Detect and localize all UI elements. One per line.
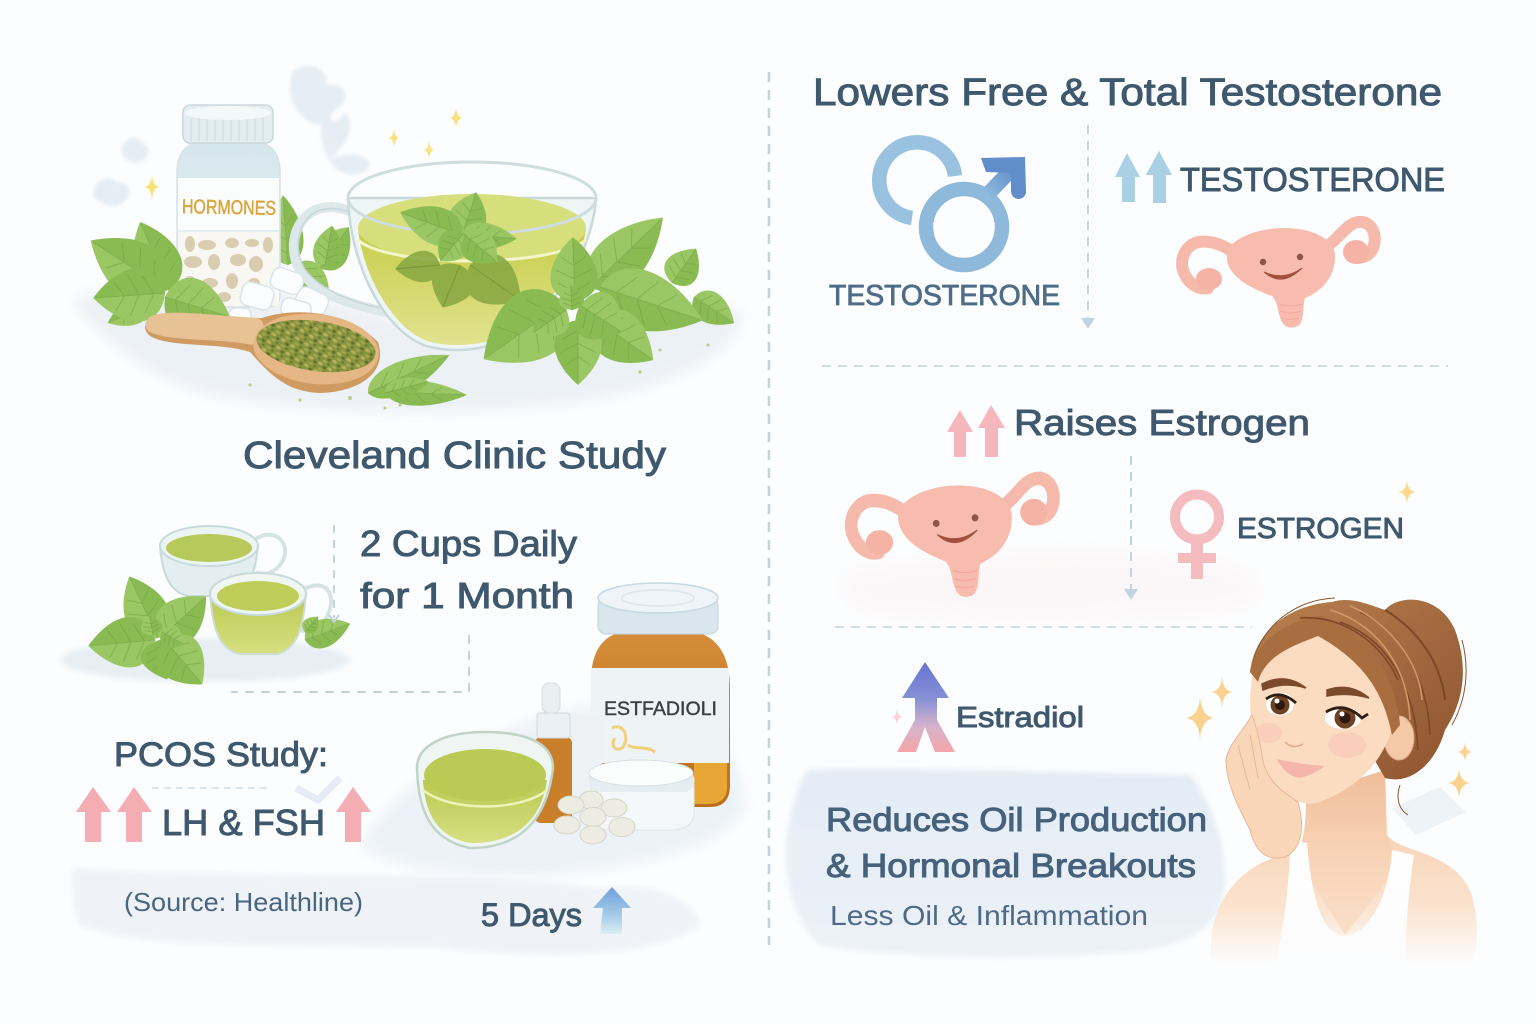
bottom-left wash <box>72 868 700 955</box>
tablets <box>229 265 331 324</box>
blue wash <box>360 700 745 876</box>
brows <box>1262 679 1369 698</box>
shadow <box>60 638 350 682</box>
amber bottle <box>591 583 730 807</box>
panel: estradiol products <box>360 583 745 876</box>
tea cup <box>294 162 596 350</box>
faint pink wash <box>843 550 1258 621</box>
text: 2 Cups Daily for 1 Month: for 1 Month <box>360 575 574 616</box>
dashed connector: testosterone <box>1082 125 1094 327</box>
illustration shadow wash <box>72 285 741 412</box>
wooden spoon with seeds <box>145 308 382 393</box>
icon: 5 days up arrow <box>593 887 631 934</box>
heading: Lowers Free and Total Testosterone: Lowers Free & Total Testosterone <box>813 72 1442 114</box>
left mint leaves <box>75 213 238 343</box>
icon: estrogen up arrows <box>947 405 1005 457</box>
dashed connector: cups <box>329 525 339 622</box>
icon: estradiol arrow <box>892 662 955 752</box>
icon: male symbols <box>879 142 1026 265</box>
illustration: woman <box>1186 598 1477 965</box>
heading: Raises Estrogen: Raises Estrogen <box>1014 402 1310 443</box>
ear <box>1384 716 1414 760</box>
label: estrogen: ESTROGEN <box>1237 513 1404 545</box>
leaves behind cup handle <box>266 194 363 311</box>
panel: two cups and mint <box>60 526 355 700</box>
dropper bottle and tube <box>535 683 602 823</box>
submerged mint leaves <box>394 244 535 321</box>
divider: horizontal upper <box>822 365 1448 367</box>
divider: horizontal lower <box>835 626 1252 628</box>
hair back and bun <box>1250 600 1463 779</box>
label: estradiol: Estradiol <box>956 702 1084 734</box>
text: reduces oil <box>826 801 1207 884</box>
icon: LH and FSH up arrows <box>76 787 371 842</box>
label: testosterone right: TESTOSTERONE <box>1180 161 1445 198</box>
sparkles woman <box>1186 677 1473 798</box>
front cup <box>210 573 331 654</box>
divider: central dashed line <box>768 72 770 945</box>
text: 2 Cups Daily for 1 Month: 2 Cups Daily <box>360 523 577 564</box>
sparkle: estrogen <box>1398 480 1416 504</box>
dashed connector: estrogen <box>1125 456 1137 598</box>
sparkles <box>144 107 463 200</box>
neck <box>1295 770 1405 935</box>
face <box>1250 634 1395 804</box>
back cup <box>160 526 285 596</box>
pills <box>554 791 635 844</box>
text: 5 Days: 5 Days <box>481 897 582 933</box>
flyaway strands <box>1252 598 1466 815</box>
hair highlights <box>1330 606 1422 720</box>
text: less oil and inflammation: Less Oil & Inflammation <box>830 900 1148 931</box>
label: testosterone left: TESTOSTERONE <box>829 280 1060 312</box>
hair front <box>1250 616 1400 735</box>
panel: Cleveland Clinic illustration <box>72 66 743 412</box>
text: source: (Source: Healthline) <box>124 887 363 917</box>
icon: uterus top <box>1182 222 1375 328</box>
text: reduces oil: & Hormonal Breakouts <box>826 847 1196 884</box>
finger lines <box>1238 735 1258 790</box>
shoulders and torso <box>1211 835 1477 965</box>
text: 2 Cups Daily for 1 Month <box>360 523 577 616</box>
text: reduces oil: Reduces Oil Production <box>826 801 1207 838</box>
faint towel <box>1392 787 1466 835</box>
bottle label text: ESTFADIOLI <box>604 699 717 720</box>
hand <box>1226 715 1302 858</box>
dashed connector: elbow <box>231 635 469 692</box>
icon: female symbol <box>1175 494 1219 579</box>
text: LH and FSH: LH & FSH <box>162 802 325 843</box>
right mint cluster <box>464 199 743 388</box>
floating mint leaves <box>394 186 518 275</box>
glass tea cup <box>417 732 553 848</box>
nose <box>1285 742 1303 747</box>
small mint leaves <box>86 567 355 700</box>
label: HORMONES: HORMONES <box>182 196 276 220</box>
tank top <box>1275 840 1414 965</box>
icon: testosterone up arrows <box>1115 151 1172 203</box>
heading: PCOS Study: PCOS Study: <box>114 736 328 774</box>
steam <box>93 66 370 206</box>
small leaf under spoon <box>361 341 467 407</box>
tea specks <box>248 344 710 410</box>
cheeks <box>1254 723 1282 743</box>
heading: Cleveland Clinic Study: Cleveland Clinic Study <box>243 435 666 477</box>
panel: oil wash <box>786 769 1225 957</box>
bun outline <box>1385 610 1445 700</box>
HORMONES bottle <box>177 105 280 307</box>
mouth <box>1277 759 1325 778</box>
hair strands <box>1300 612 1430 750</box>
eyes <box>1266 692 1368 729</box>
faint dashes and check <box>152 778 340 800</box>
icon: uterus estrogen <box>851 478 1054 597</box>
cream jar <box>589 760 694 830</box>
